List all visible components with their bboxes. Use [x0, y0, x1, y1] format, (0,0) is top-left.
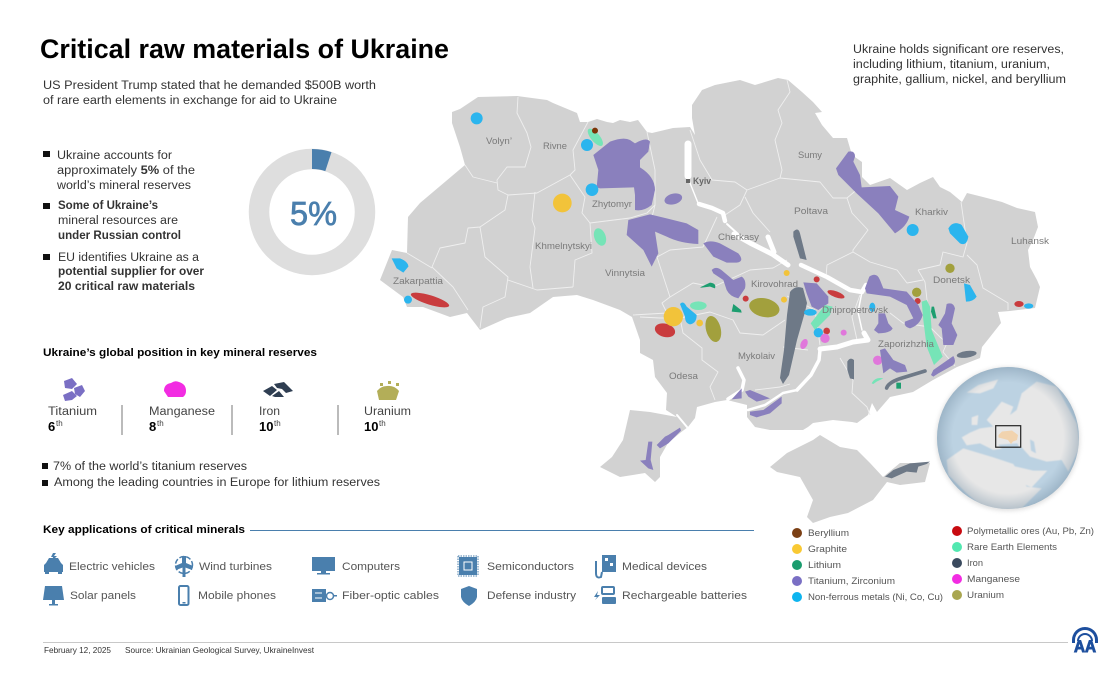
- subtitle: of rare earth elements in exchange for aid to Ukraine: [43, 95, 337, 107]
- legend: Manganese: [967, 574, 1020, 584]
- map: oblast labels: Kharkiv: [915, 207, 948, 218]
- legend: Rare Earth Elements: [967, 542, 1057, 552]
- map: oblast labels: Cherkasy: [718, 232, 759, 243]
- top-right note: graphite, gallium, nickel, and beryllium: [853, 74, 1066, 86]
- ranking: uranium: [364, 381, 411, 434]
- map: oblast labels: Dnipropetrovsk: [822, 305, 888, 316]
- deposits: western and central: [392, 112, 749, 344]
- ranking: manganese: Manganese: [149, 406, 215, 418]
- legend: Polymetallic ores (Au, Pb, Zn): [967, 526, 1094, 536]
- ranking: uranium: Uranium: [364, 406, 411, 418]
- ranking: titanium: 6: [48, 419, 55, 434]
- bullet list: key facts: 20 critical raw materials: [58, 281, 195, 293]
- footer rule and source: [43, 642, 1068, 655]
- ranking: manganese: [149, 381, 215, 434]
- label: computers: Computers: [342, 561, 401, 573]
- globe: Ukraine highlight: [998, 430, 1018, 444]
- top-right note: [853, 44, 1066, 86]
- map: oblast labels: Zhytomyr: [592, 199, 632, 210]
- logo: AA: AA: [1074, 637, 1096, 656]
- legend: [792, 526, 1094, 602]
- footer rule and source: February 12, 2025: [44, 645, 111, 655]
- label: mobile phones: Mobile phones: [198, 590, 277, 602]
- legend: Lithium: [808, 560, 841, 570]
- legend: Graphite: [808, 544, 847, 554]
- map: oblast labels: Zaporizhzhia: [878, 339, 935, 350]
- map: oblast labels: Mykolaiv: [738, 351, 775, 362]
- map: oblast labels: Volyn’: [486, 136, 512, 147]
- ranking: uranium: 10: [364, 419, 378, 434]
- map: oblast labels: Kyiv: [693, 176, 712, 187]
- map: oblast labels: Vinnytsia: [605, 268, 646, 279]
- icon: mobile phones: [179, 586, 188, 605]
- label: defense industry: Defense industry: [487, 590, 577, 602]
- deposit: long iron belt: [780, 287, 807, 384]
- map of Ukraine: [380, 78, 1049, 523]
- ranking: titanium: th: [56, 419, 63, 428]
- ranking: uranium: th: [379, 419, 386, 428]
- reserve notes: 7% of the world’s titanium reserves: [53, 461, 247, 473]
- bullet list: key facts: [43, 150, 205, 293]
- map: oblast labels: Khmelnytskyi: [535, 241, 592, 252]
- icon: wind turbines: [175, 556, 193, 577]
- map: oblast labels: Donetsk: [933, 275, 970, 286]
- icon: semiconductors: [458, 556, 478, 576]
- ranking: titanium: [48, 378, 97, 434]
- label: solar panels: Solar panels: [70, 590, 137, 602]
- icon: computers: [312, 557, 335, 574]
- deposits: southern: [640, 371, 930, 478]
- map: oblast labels: Rivne: [543, 141, 567, 152]
- reserve notes: [42, 461, 380, 489]
- bullet list: key facts: approximately 5% of the: [57, 165, 195, 177]
- map: oblast labels: Odesa: [669, 371, 699, 382]
- map: Crimea: [770, 435, 930, 523]
- legend: Non-ferrous metals (Ni, Co, Cu): [808, 592, 943, 602]
- donut chart: 5%: [259, 149, 365, 265]
- title: Critical raw materials of Ukraine: [40, 34, 449, 64]
- ranking: titanium: Titanium: [48, 406, 97, 418]
- label: electric vehicles: Electric vehicles: [69, 561, 156, 573]
- icon: fiber-optic cables: [312, 589, 337, 602]
- label: medical devices: Medical devices: [622, 561, 708, 573]
- ranking: manganese: th: [157, 419, 164, 428]
- top-right note: Ukraine holds significant ore reserves,: [853, 44, 1064, 56]
- bullet list: key facts: Ukraine accounts for: [57, 150, 172, 162]
- legend: Titanium, Zirconium: [808, 576, 895, 586]
- label: rechargeable batteries: Rechargeable batteries: [622, 590, 748, 602]
- reserve notes: Among the leading countries in Europe for lithium reserves: [54, 477, 380, 489]
- subtitle: US President Trump stated that he demanded $500B worth: [43, 80, 376, 92]
- ranking: iron: th: [274, 419, 281, 428]
- bullet list: key facts: under Russian control: [58, 230, 181, 242]
- subtitle: [43, 80, 376, 107]
- map: oblast labels: Sumy: [798, 150, 822, 161]
- logo: AA: [1074, 628, 1096, 656]
- deposits: eastern: [747, 151, 1033, 379]
- ranking: iron: Iron: [259, 406, 280, 418]
- icon: electric vehicles: [44, 553, 63, 574]
- globe inset: [936, 367, 1080, 513]
- map: oblast labels: Kirovohrad: [751, 279, 798, 290]
- map: Dnipro river and reservoirs: [677, 144, 868, 427]
- globe: locator box: [996, 426, 1021, 447]
- icon: rechargeable batteries: [594, 587, 616, 604]
- ranking: iron: 10: [259, 419, 273, 434]
- map: oblast labels: Poltava: [794, 206, 829, 217]
- legend: Iron: [967, 558, 983, 568]
- legend: Beryllium: [808, 528, 849, 538]
- bullet list: key facts: Some of Ukraine’s: [58, 200, 158, 212]
- label: wind turbines: Wind turbines: [199, 561, 273, 573]
- label: fiber-optic cables: Fiber-optic cables: [342, 590, 440, 602]
- ranking: manganese: 8: [149, 419, 156, 434]
- label: semiconductors: Semiconductors: [487, 561, 575, 573]
- map: oblast labels: [393, 136, 1049, 382]
- donut chart: 5%: 5%: [290, 195, 337, 232]
- map: oblast labels: Luhansk: [1011, 236, 1049, 247]
- icon: medical devices: [596, 555, 616, 578]
- top-right note: including lithium, titanium, uranium,: [853, 59, 1050, 71]
- bullet list: key facts: world’s mineral reserves: [56, 180, 191, 192]
- section heading: key applications: Key applications of critical minerals: [43, 524, 245, 536]
- ranking: iron: [259, 382, 293, 434]
- icon: defense industry: [461, 586, 477, 606]
- bullet list: key facts: EU identifies Ukraine as a: [58, 252, 200, 264]
- icon: solar panels: [43, 586, 64, 606]
- map: oblast labels: Zakarpattia: [393, 276, 444, 287]
- map: oblast boundaries: [407, 80, 1008, 415]
- footer rule and source: Source: Ukrainian Geological Survey, UkraineInvest: [125, 645, 315, 655]
- bullet list: key facts: potential supplier for over: [58, 266, 205, 278]
- section heading: global position: Ukraine’s global position in key mineral reserves: [43, 347, 317, 359]
- bullet list: key facts: mineral resources are: [58, 215, 178, 227]
- legend: Uranium: [967, 590, 1004, 600]
